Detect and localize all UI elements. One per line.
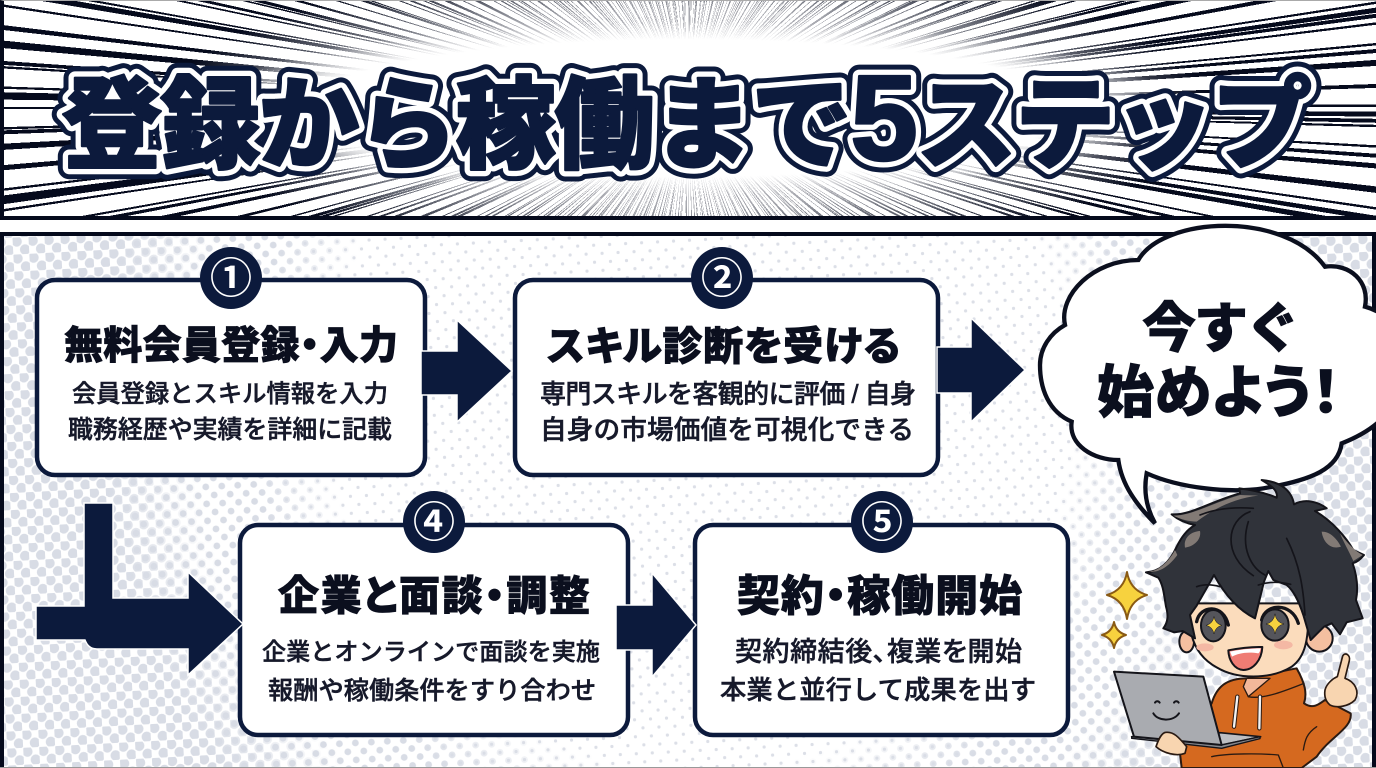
step 2 heading: スキル診断を受ける [547,325,900,369]
arrow: step 1 to 2 [421,320,512,422]
character: boy with laptop [1114,480,1364,768]
hair highlights [1148,495,1363,572]
eyes [1197,607,1298,641]
step 5 description: 契約締結後、複業を開始 [735,637,1022,667]
step 4 description: 報酬や稼働条件をすり合わせ [268,677,596,705]
face [1189,603,1308,676]
ears [1179,625,1333,652]
badge 1: ① [210,255,252,302]
badge 4 [403,491,465,553]
title: 登録から稼働まで5ステップ [62,50,1312,186]
pointing hand [1325,654,1357,707]
blush [1196,643,1214,651]
title: 登録から稼働まで5ステップ [62,50,1312,186]
header panel: speed lines [0,0,1376,220]
hair [1146,480,1364,640]
bubble text [1097,299,1340,425]
speech bubble [1040,226,1376,523]
laptop [1132,733,1261,745]
step 5 heading: 契約・稼働開始 [737,573,1022,621]
step 4 description [262,639,600,705]
step 2 description: 自身の市場価値を可視化できる [540,415,914,445]
panel: step 4 [240,491,628,735]
icon: sparkles [1102,572,1147,648]
step 5 description: 本業と並行して成果を出す [720,675,1036,705]
step 4 heading: 企業と面談・調整 [278,573,590,619]
step 5 description [720,637,1036,705]
badge 2: ② [701,255,743,302]
panel: step 1 [37,247,425,475]
mouth [1228,647,1262,670]
lower hand [1156,732,1187,755]
step 1 description: 会員登録とスキル情報を入力 [72,381,388,408]
bubble text: 始めよう！ [1097,361,1340,425]
main panel: halftone background [0,232,1376,768]
step 2 description [540,379,916,445]
badge 5 [851,491,913,553]
step 1 heading: 無料会員登録・入力 [64,325,398,368]
hoodie [1180,668,1351,768]
badge 4: ④ [413,499,455,546]
bubble text: 今すぐ [1142,299,1300,359]
badge 2 [691,247,753,309]
step 1 description: 職務経歴や実績を詳細に記載 [68,416,392,444]
hair strands [1197,508,1305,615]
title: 登録から稼働まで5ステップ [62,50,1312,186]
hood strings [1234,697,1260,728]
step 4 description: 企業とオンラインで面談を実施 [262,639,600,666]
step 1 description [68,381,392,444]
arrow: step 3 to 4 elbow [36,503,243,675]
arrow: step 2 to speech bubble [937,318,1025,422]
panel: step 5 [695,491,1068,735]
step 2 description: 専門スキルを客観的に評価 / 自身 [540,379,916,409]
panel: step 2 [515,247,938,475]
badge 1 [200,247,262,309]
arrow: step 4 to 5 [616,573,696,677]
badge 5: ⑤ [861,499,903,546]
